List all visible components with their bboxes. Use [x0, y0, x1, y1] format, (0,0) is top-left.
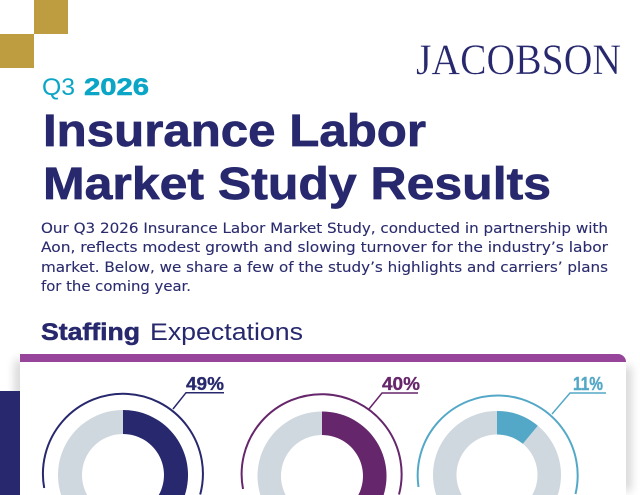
quarter label: Q3 — [42, 74, 75, 101]
panel: staffing card — [20, 354, 626, 495]
title: Market Study Results — [43, 158, 551, 209]
card shadow — [16, 360, 630, 491]
intro paragraph: market. Below, we share a few of the study’s highlights and carriers’ plans — [41, 260, 608, 276]
intro paragraph: Aon, reflects modest growth and slowing turnover for the industry’s labor — [41, 240, 608, 256]
donut chart: 49%: 49% — [186, 373, 224, 394]
quarter label — [42, 74, 149, 101]
logo: Jacobson: JACOBSON — [416, 37, 621, 84]
decorative gold squares — [0, 0, 68, 68]
donut chart: 40%: 40% — [382, 373, 420, 394]
section heading: staffing expectations — [41, 319, 303, 346]
navy side block — [0, 391, 20, 495]
title — [43, 105, 551, 209]
intro paragraph: Our Q3 2026 Insurance Labor Market Study, conducted in partnership with — [41, 221, 608, 237]
card top bar — [20, 354, 626, 362]
donut chart: 11% — [418, 373, 606, 495]
quarter label: 2026 — [84, 74, 149, 101]
section heading: staffing expectations: Expectations — [150, 319, 303, 346]
title: Insurance Labor — [43, 105, 426, 156]
donut chart: 49% — [43, 373, 224, 495]
section heading: staffing expectations: Staffing — [41, 319, 140, 346]
intro paragraph — [41, 221, 608, 295]
donut chart: 11%: 11% — [573, 373, 603, 394]
intro paragraph: for the coming year. — [41, 279, 191, 295]
donut chart: 40% — [242, 373, 420, 495]
